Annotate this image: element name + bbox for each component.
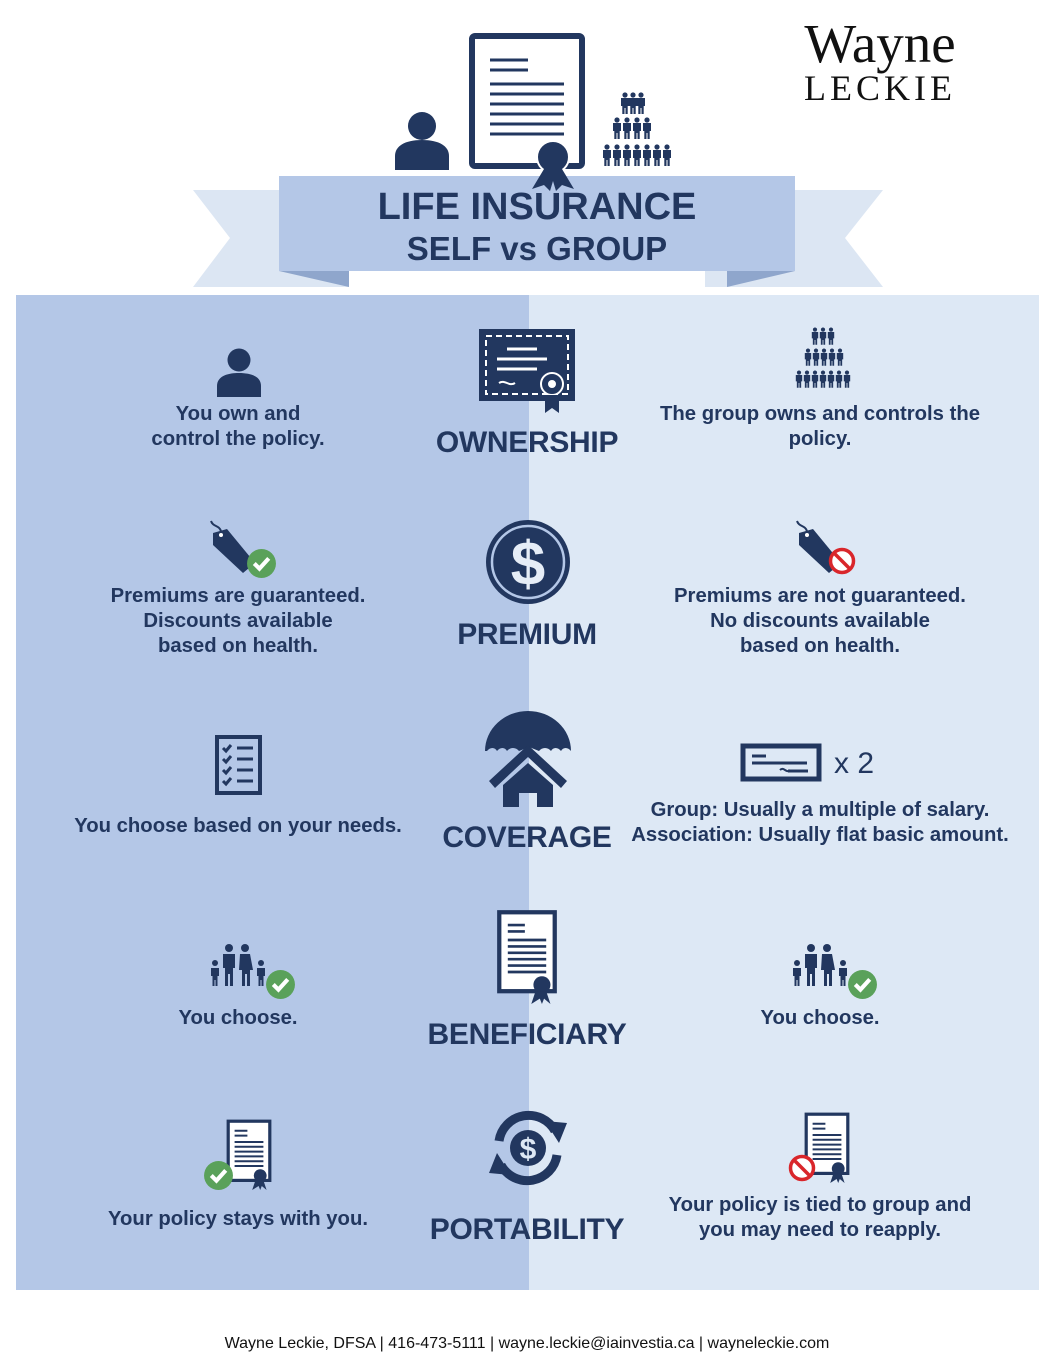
- heading: premium: PREMIUM: [457, 618, 597, 651]
- text: self beneficiary: You choose.: [178, 1007, 298, 1029]
- text: self ownership: You own and: [176, 403, 300, 425]
- icon: checklist: [215, 735, 262, 795]
- icon: document with no sign: [788, 1112, 850, 1183]
- text: group ownership: policy.: [789, 428, 851, 450]
- row: ownership: [151, 328, 980, 459]
- icon: umbrella house: [485, 711, 571, 807]
- row: portability: [108, 1110, 971, 1246]
- text: group ownership: [660, 403, 980, 450]
- text: group premium: based on health.: [740, 635, 900, 657]
- text: group ownership: The group owns and controls the: [660, 403, 980, 425]
- header icon: policy document: [469, 33, 585, 191]
- heading: beneficiary: BENEFICIARY: [428, 1018, 626, 1051]
- text: self portability: Your policy stays with you.: [108, 1208, 368, 1230]
- text: self premium: Premiums are guaranteed.: [111, 585, 365, 607]
- heading: coverage: COVERAGE: [442, 821, 612, 854]
- icon: cheque x2: [740, 744, 874, 782]
- icon: group pyramid: [796, 328, 850, 388]
- icon: family with check (group): [793, 944, 877, 999]
- header icon: group pyramid: [603, 92, 671, 166]
- icon: dollar coin: $: [511, 530, 545, 599]
- text: self premium: based on health.: [158, 635, 318, 657]
- text: self ownership: [151, 403, 325, 450]
- icon: family with check: [211, 944, 295, 999]
- logo: Wayne Leckie: Wayne: [804, 13, 956, 74]
- text: group portability: Your policy is tied to group and: [669, 1194, 971, 1216]
- icon: certificate: [479, 329, 575, 413]
- row: coverage: [74, 711, 1009, 854]
- panel: self (left): [16, 295, 529, 1290]
- title text: [378, 186, 696, 267]
- text: group premium: No discounts available: [710, 610, 930, 632]
- footer contact: Wayne Leckie, DFSA | 416-473-5111 | wayne.leckie@iainvestia.ca | wayneleckie.com: [225, 1335, 829, 1352]
- text: self coverage: You choose based on your needs.: [74, 815, 402, 837]
- icon: document with check: [204, 1120, 272, 1190]
- text: self ownership: control the policy.: [151, 428, 325, 450]
- icon: person: [217, 348, 261, 397]
- text: group premium: Premiums are not guaranteed.: [674, 585, 966, 607]
- title text: LIFE INSURANCE: [378, 186, 696, 228]
- title ribbon: [193, 176, 883, 287]
- icon: dollar coin: [486, 520, 570, 604]
- text: group portability: [669, 1194, 971, 1241]
- heading: ownership: OWNERSHIP: [436, 426, 618, 459]
- heading: portability: PORTABILITY: [430, 1213, 624, 1246]
- title text: SELF vs GROUP: [407, 230, 667, 267]
- text: group beneficiary: You choose.: [760, 1007, 880, 1029]
- logo: Wayne Leckie: LECKIE: [804, 68, 956, 108]
- icon: dollar circular arrows: $: [520, 1133, 537, 1166]
- row: beneficiary: [178, 910, 880, 1051]
- text: group coverage: Association: Usually flat basic amount.: [631, 824, 1009, 846]
- logo: Wayne Leckie: [804, 13, 956, 108]
- row: premium: [111, 520, 966, 657]
- text: group coverage: [631, 799, 1009, 846]
- text: self premium: Discounts available: [143, 610, 333, 632]
- icon: cheque x2: x 2: [834, 747, 874, 780]
- text: group portability: you may need to reapply.: [699, 1219, 941, 1241]
- header icon: person: [395, 112, 449, 170]
- panel: group (right): [529, 295, 1039, 1290]
- icon: tag with no sign: [796, 520, 856, 574]
- icon: tag with check: [210, 520, 276, 578]
- text: group coverage: Group: Usually a multiple of salary.: [651, 799, 989, 821]
- text: group premium: [674, 585, 966, 657]
- icon: dollar circular arrows: [489, 1110, 567, 1186]
- text: self premium: [111, 585, 365, 657]
- icon: document: [497, 910, 557, 1004]
